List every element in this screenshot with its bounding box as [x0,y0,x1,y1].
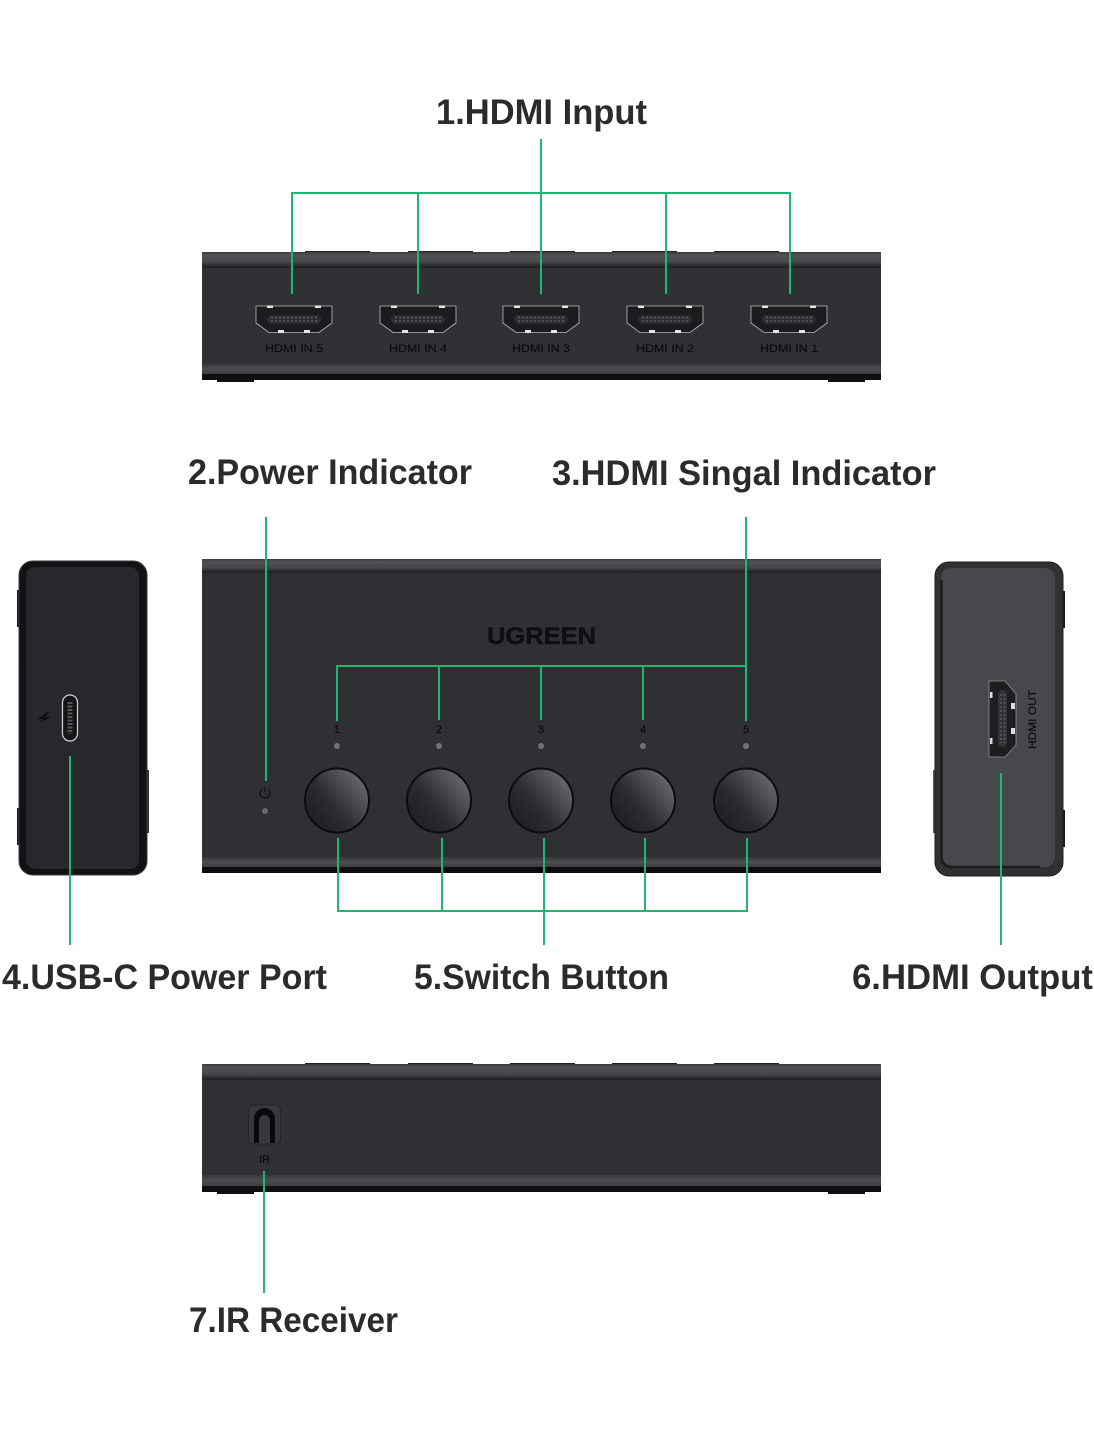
HDMI IN 2 port [627,306,703,355]
logo: UGREEN: UGREEN [487,623,596,650]
channel numbers: 2 [436,724,442,736]
HDMI IN 4 port [380,306,456,355]
HDMI IN 4 port: HDMI IN 4 [389,343,447,355]
IR label: IR [259,1154,270,1166]
panel: back view with IR receiver [202,1063,881,1194]
heading: 4.USB-C Power Port: 4.USB-C Power Port [2,958,327,997]
channel numbers [334,724,749,736]
panel: front view of switch [202,559,881,873]
HDMI IN 1 port: HDMI IN 1 [760,343,818,355]
USB-C port [62,695,78,741]
heading: 7.IR Receiver: 7.IR Receiver [189,1301,398,1340]
switch buttons [305,768,778,832]
icon: bolt [37,712,51,724]
HDMI OUT label: HDMI OUT [1027,690,1039,749]
HDMI out port [989,681,1016,757]
channel numbers: 3 [538,724,544,736]
HDMI IN 2 port: HDMI IN 2 [636,343,694,355]
channel numbers: 1 [334,724,340,736]
heading: 2.Power Indicator: 2.Power Indicator [188,453,472,492]
HDMI IN 1 port [751,306,827,355]
panel: left side view with USB-C port [17,561,149,875]
callout line: HDMI output [1000,773,1002,945]
icon: power symbol [260,787,270,798]
heading: 1.HDMI Input: 1.HDMI Input [436,93,647,132]
HDMI IN 5 port [256,306,332,355]
heading: 3.HDMI Singal Indicator: 3.HDMI Singal Indicator [552,454,936,493]
callout lines: HDMI input [292,139,790,294]
callout line: USB-C power port [69,756,71,945]
heading: 6.HDMI Output: 6.HDMI Output [852,958,1093,997]
HDMI IN 3 port [503,306,579,355]
channel numbers: 5 [743,724,749,736]
channel numbers: 4 [640,724,646,736]
callout line: power indicator [265,517,267,781]
IR receiver window [248,1105,280,1144]
HDMI IN 3 port: HDMI IN 3 [512,343,570,355]
heading: 5.Switch Button: 5.Switch Button [414,958,669,997]
channel indicator LEDs [334,743,749,749]
HDMI IN 5 port: HDMI IN 5 [265,343,323,355]
callout line: IR receiver [263,1171,265,1293]
callout lines: switch button [338,838,747,945]
power LED [262,808,268,814]
panel: top view of switch with HDMI inputs [202,251,881,382]
panel: right side view with HDMI output [933,562,1065,876]
callout lines: HDMI signal indicator [337,517,746,721]
